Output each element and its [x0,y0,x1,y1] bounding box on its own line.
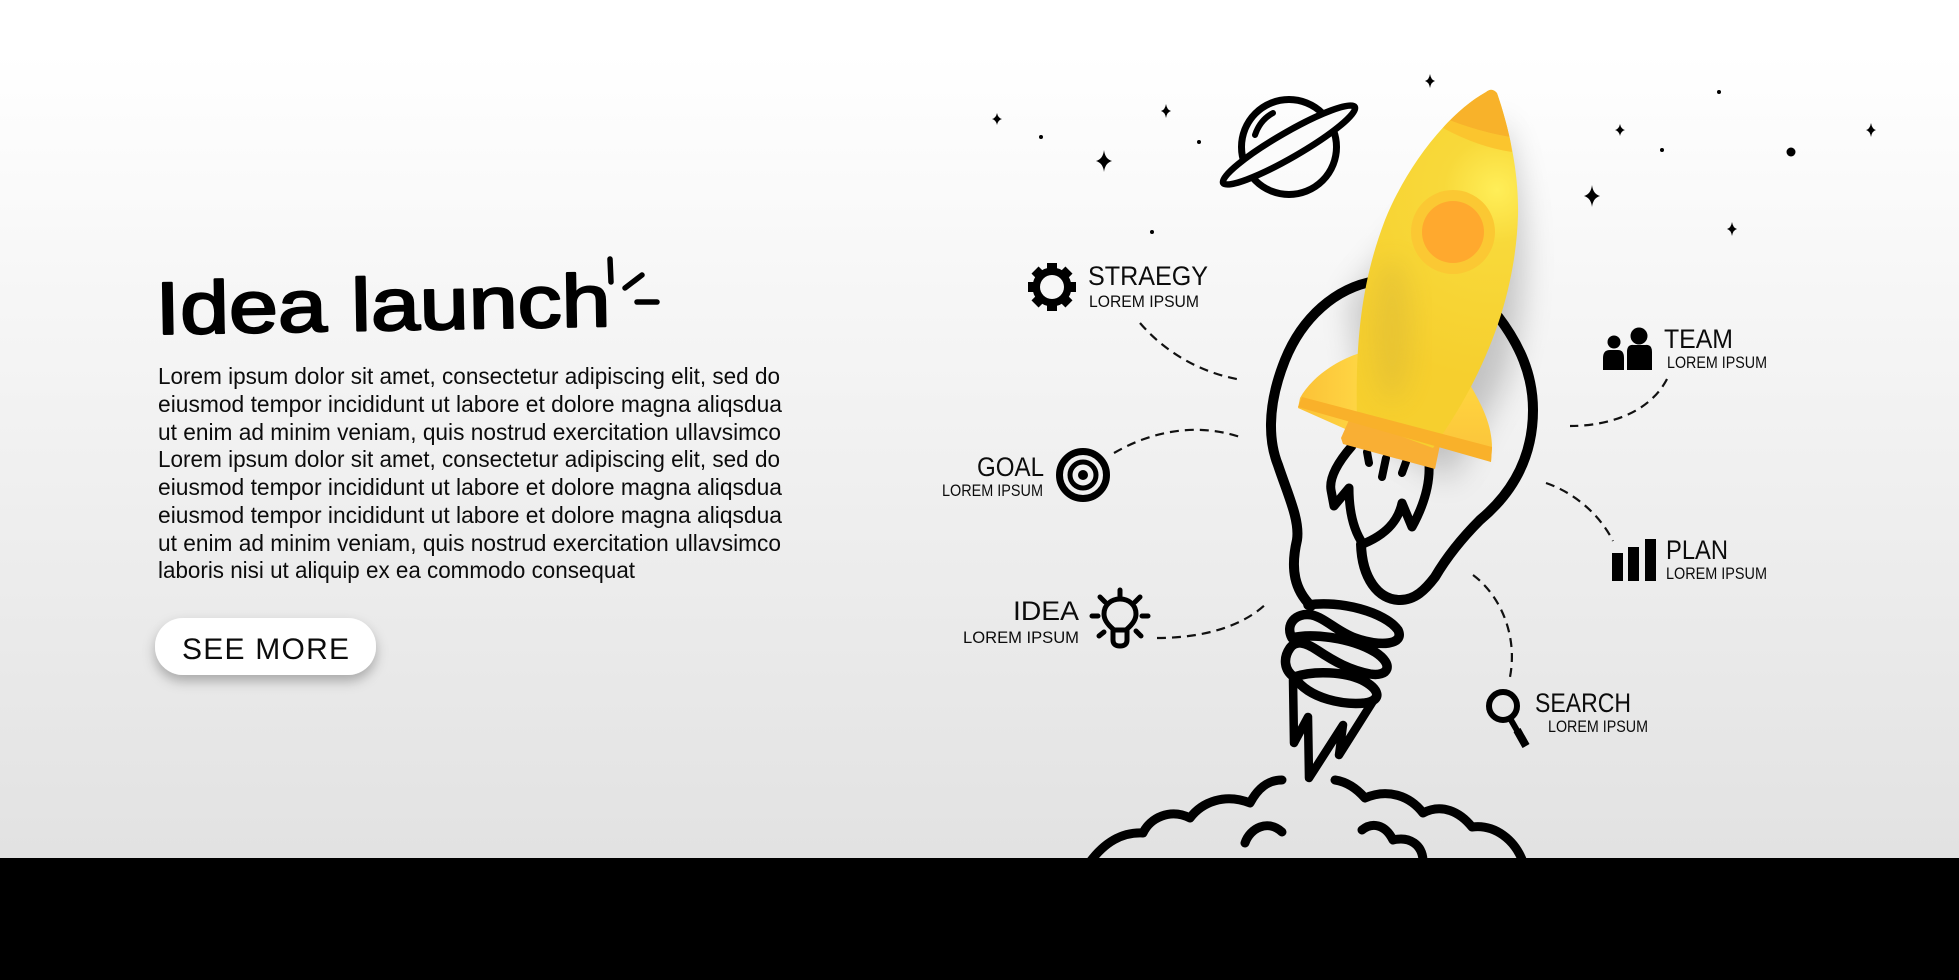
connector: goal [1114,430,1240,453]
bulb screw spiral [1285,604,1399,703]
title: Idea launch [155,259,611,350]
item: strategy: STRAEGY [1088,261,1208,291]
item: team: LOREM IPSUM [1667,353,1767,372]
nose stripe [1443,120,1512,152]
item: search: SEARCH [1535,688,1631,718]
button: see more [155,618,376,675]
item: search: LOREM IPSUM [1548,717,1648,736]
paragraph: laboris nisi ut aliquip ex ea commodo consequat [158,557,636,583]
icon: gear [1028,263,1076,311]
item: idea: IDEA [1013,596,1079,626]
left fin [1298,353,1370,440]
icon: ringed planet [1217,96,1361,194]
window [1411,190,1495,274]
connector: team [1570,379,1667,426]
paragraph: ut enim ad minim veniam, quis nostrud exercitation ullavsimco [158,530,781,556]
rocket [1298,90,1523,480]
light bulb outline [1271,281,1533,778]
item: team [1603,324,1767,372]
item: goal: GOAL [977,452,1044,482]
item: plan [1612,535,1767,583]
icon: small bulb [1092,590,1148,646]
nozzle [1341,420,1440,469]
connector: strategy [1140,323,1242,380]
connector: search [1473,575,1512,677]
stars and dots [992,74,1876,236]
icon: magnifier [1489,692,1526,746]
connector: idea [1157,602,1268,638]
paragraph: eiusmod tempor incididunt ut labore et dolore magna aliqsdua [158,474,782,500]
item: team: TEAM [1664,324,1733,354]
title sparkle [610,259,657,302]
inner flame under rocket [1331,446,1429,544]
nose cone [1449,90,1510,137]
right fin [1420,383,1492,462]
paragraph: eiusmod tempor incididunt ut labore et dolore magna aliqsdua [158,391,782,417]
item: search [1489,688,1648,746]
item: plan: LOREM IPSUM [1666,564,1767,583]
item: goal: LOREM IPSUM [942,481,1043,500]
rocket body [1357,90,1518,448]
rocket shadow [1350,120,1523,480]
paragraph: ut enim ad minim veniam, quis nostrud exercitation ullavsimco [158,419,781,445]
paragraph: Lorem ipsum dolor sit amet, consectetur adipiscing elit, sed do [158,363,780,389]
item: plan: PLAN [1666,535,1728,565]
bottom exhaust flame [1293,680,1375,778]
button: see more: SEE MORE [182,633,349,666]
item: strategy: LOREM IPSUM [1089,292,1199,311]
connector: plan [1546,483,1613,541]
black footer band [0,858,1959,980]
icon: target [1060,452,1106,498]
item: idea [963,590,1148,647]
fin band [1298,397,1492,462]
launch smoke cloud [1090,780,1523,862]
icon: bar chart [1612,539,1656,581]
item: strategy [1028,261,1208,311]
paragraph [158,363,782,583]
paragraph: Lorem ipsum dolor sit amet, consectetur adipiscing elit, sed do [158,446,780,472]
body shade [1372,90,1512,400]
item: goal [942,452,1106,500]
item: idea: LOREM IPSUM [963,628,1079,647]
icon: people [1603,328,1652,370]
paragraph: eiusmod tempor incididunt ut labore et dolore magna aliqsdua [158,502,782,528]
